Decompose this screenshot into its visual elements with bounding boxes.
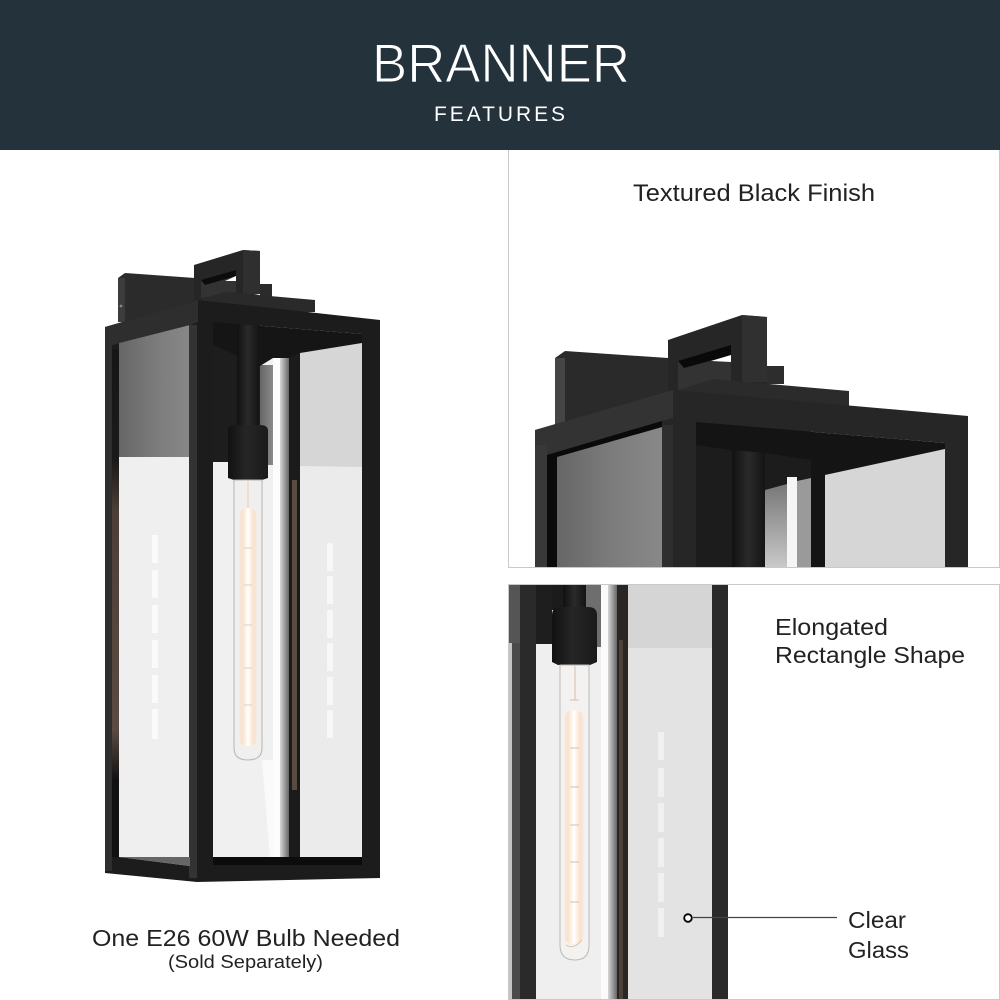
centre opening [213,320,300,860]
close-up of lantern top [535,315,968,570]
glass label: Clear [848,907,906,933]
left glass pane [119,325,190,860]
close-up interior [696,420,825,570]
close-up frame [535,390,968,570]
close-up left pane [557,427,662,567]
header banner [0,0,1000,150]
bulb [560,665,589,960]
lantern frame [105,300,380,882]
left frame strip [508,585,536,1000]
shape label [775,614,965,668]
close-up frame shading [535,390,945,570]
finish label: Textured Black Finish [633,180,875,207]
shape label: Elongated [775,614,888,640]
close-up of bulb and glass [508,585,728,1000]
ceiling shadow [213,322,362,366]
bulb note: One E26 60W Bulb Needed [92,925,400,951]
shape label: Rectangle Shape [775,642,965,668]
close-up right pane [825,449,945,567]
close-up handle [668,315,849,406]
title: BRANNER [372,32,630,94]
panel: full lantern with bulb note [92,250,400,972]
close-up bracket [555,351,668,426]
wall bracket [118,273,195,322]
right glass [628,585,712,1000]
right glass pane [300,343,362,860]
subtitle: FEATURES [434,103,568,126]
right frame strip [712,585,728,1000]
clear glass pointer [684,914,837,922]
divider post [617,585,628,1000]
panel: elongated shape and clear glass [508,584,1000,1000]
lantern illustration [105,250,380,882]
top handle and cap [194,250,315,312]
centre glass [536,585,617,1000]
glass label [848,907,909,963]
sold separately note: (Sold Separately) [168,952,323,972]
stem and socket [552,585,597,665]
stem, socket and bulb [228,322,268,760]
panel: textured black finish [508,150,1000,570]
glass label: Glass [848,937,909,963]
lantern frame shading [105,300,362,878]
